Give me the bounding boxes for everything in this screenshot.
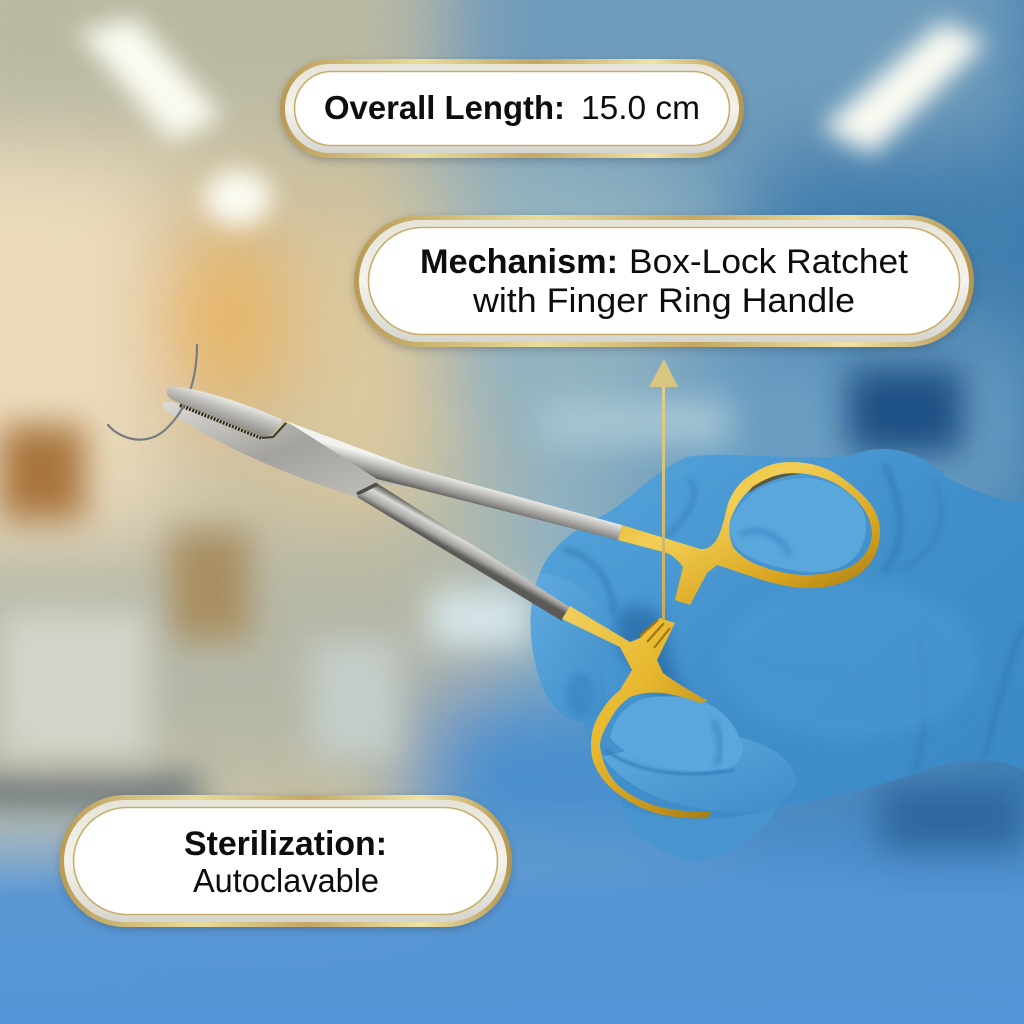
value text line 2: with Finger Ring Handle — [472, 282, 855, 320]
needle holder instrument — [108, 345, 880, 818]
callout arrow to ratchet — [649, 359, 678, 620]
callout: mechanism — [354, 215, 974, 347]
palm shadow under ratchet — [615, 606, 690, 700]
value text line 1: Box-Lock Ratchet — [629, 243, 909, 281]
label text: Sterilization: — [184, 825, 387, 863]
gold lower handle with finger ring — [562, 606, 711, 818]
hand in blue surgical glove — [531, 449, 1024, 862]
ring finger — [603, 738, 796, 812]
lower shaft — [357, 483, 571, 621]
curved suture needle — [108, 345, 197, 440]
glove shading folds — [565, 465, 1024, 770]
label text: Overall Length: — [324, 89, 565, 126]
upper ring inner shadow — [748, 474, 800, 494]
glove: palm and back of hand — [531, 449, 1024, 862]
callout: sterilization — [59, 795, 512, 927]
floor blue — [0, 790, 1024, 1024]
upper shaft — [286, 421, 622, 540]
middle finger in lower ring — [610, 696, 743, 771]
serrated jaw gap — [180, 405, 262, 438]
step between body and lower shaft — [357, 484, 377, 494]
upper jaw — [167, 386, 283, 437]
callout: overall length — [280, 59, 744, 158]
label text: Mechanism: — [420, 243, 618, 281]
value text: 15.0 cm — [581, 89, 700, 126]
little finger — [623, 807, 777, 862]
gold upper handle with finger ring — [618, 462, 880, 605]
highlight on back of hand — [720, 580, 980, 740]
jaw body — [162, 402, 410, 497]
jaw step edge — [262, 423, 286, 438]
thumb in upper ring — [730, 478, 866, 572]
index finger — [531, 573, 613, 722]
middle fingertip shading — [712, 720, 720, 765]
value text: Autoclavable — [193, 862, 379, 899]
ratchet teeth — [640, 620, 670, 648]
index fingertip shading — [566, 673, 594, 717]
thumb shading — [740, 531, 790, 555]
